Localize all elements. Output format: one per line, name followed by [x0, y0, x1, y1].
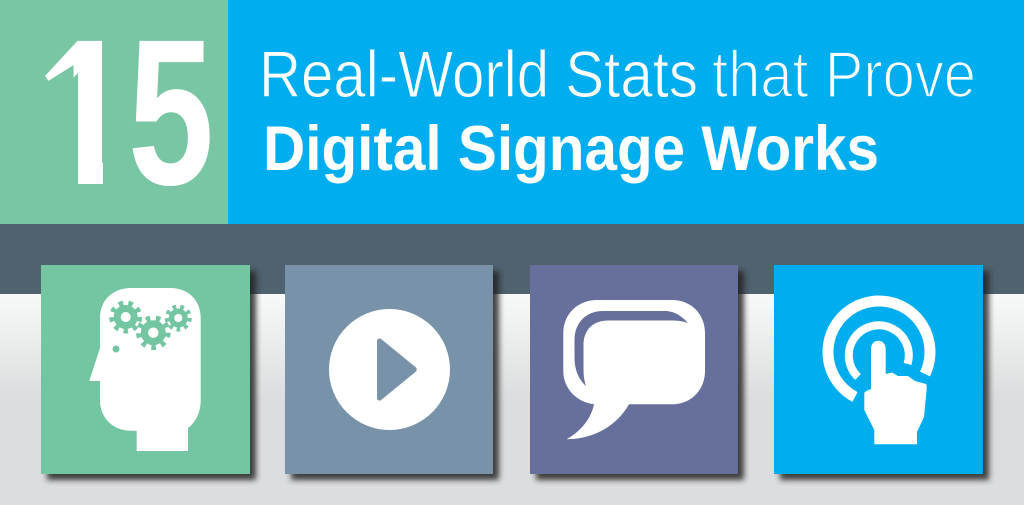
card: touch	[774, 265, 989, 480]
page background	[0, 294, 1024, 505]
icon: inner ring	[849, 325, 909, 377]
icon: bubble inner crescent	[574, 311, 688, 386]
title line 1	[259, 37, 976, 111]
big number 15	[45, 40, 210, 186]
icon: outer ring	[828, 301, 930, 397]
title line 2: Digital Signage Works	[263, 114, 879, 184]
icon: speech bubble	[563, 300, 705, 439]
card: head with gears	[41, 265, 256, 480]
icon: play circle	[329, 309, 450, 430]
header: title panel	[228, 0, 1024, 224]
big number 15: 1	[25, 0, 141, 229]
card: speech bubble	[530, 265, 744, 480]
icon: head	[89, 288, 201, 451]
big number 15: 5	[128, 0, 214, 229]
icon: play triangle	[377, 338, 417, 401]
title line 1: Real-World Stats	[259, 37, 698, 111]
title line 1: that Prove	[712, 37, 976, 111]
icon: hand	[864, 341, 927, 444]
icon: gears	[112, 304, 189, 352]
header: number panel	[0, 0, 228, 229]
card: play button	[285, 265, 499, 480]
dark band	[0, 224, 1024, 294]
